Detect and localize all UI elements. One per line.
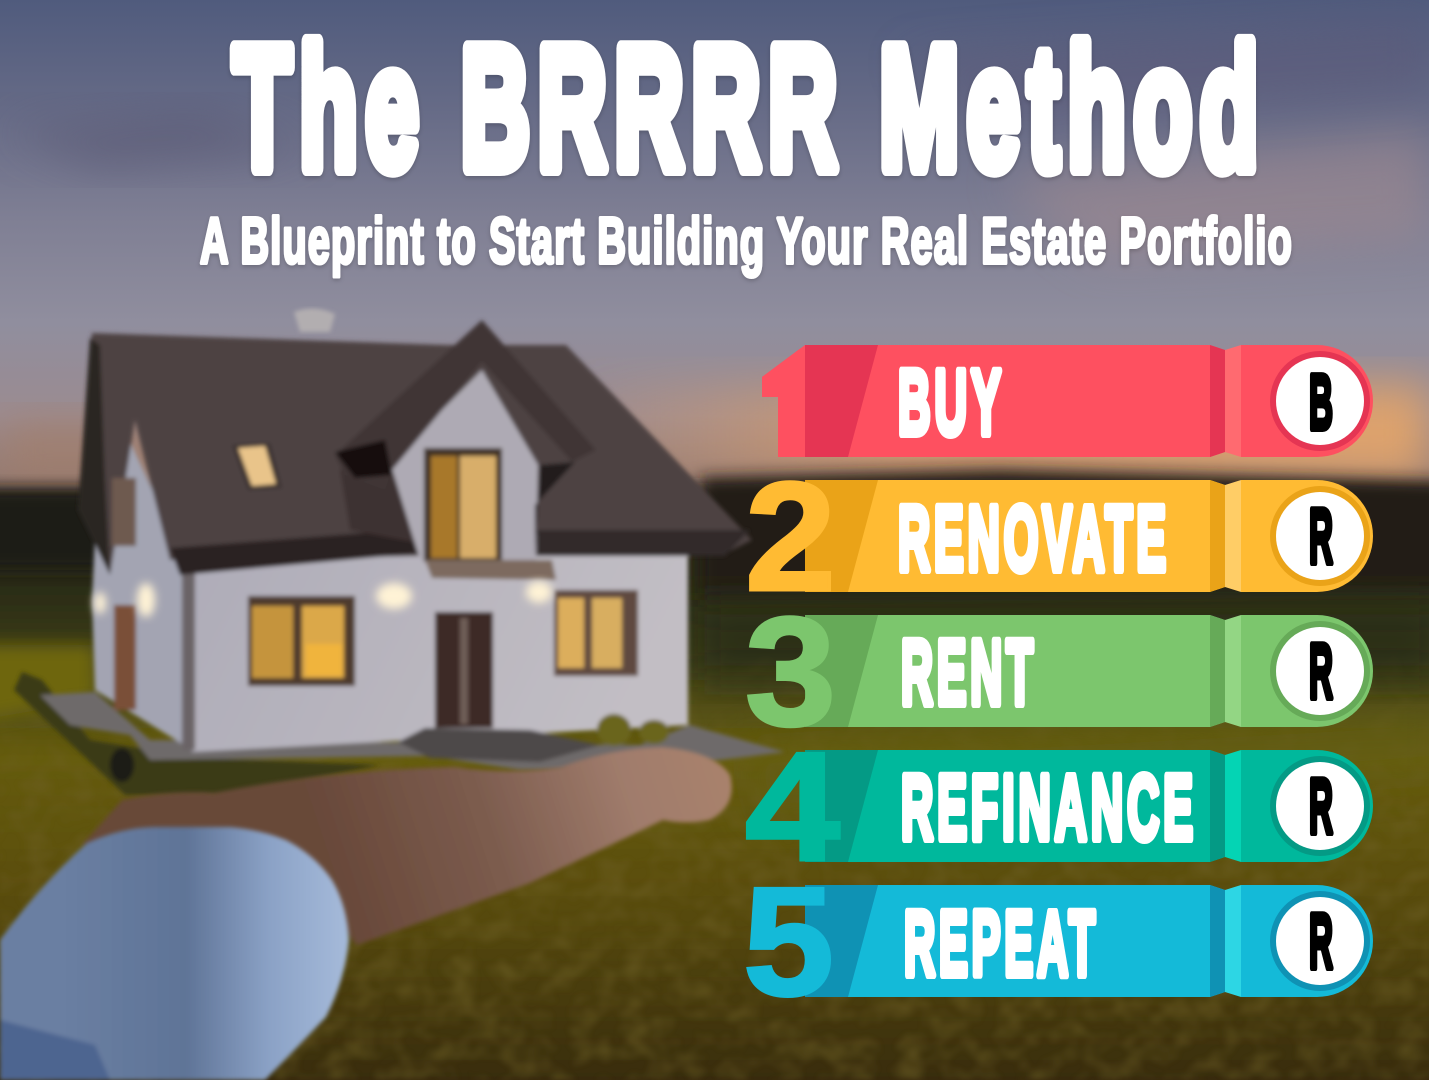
badge B: B [1309, 358, 1333, 446]
base platform [14, 672, 380, 795]
steps [398, 728, 600, 762]
sleeve [0, 827, 349, 1080]
badge R [1270, 486, 1370, 586]
number 3: 3 [745, 585, 836, 758]
step 2: renovate [745, 450, 1373, 623]
lights [94, 581, 552, 617]
front window left [248, 596, 355, 686]
badge B [1270, 351, 1370, 451]
step 5: repeat [743, 855, 1373, 1028]
step 4: refinance [745, 720, 1373, 893]
front door [435, 612, 493, 728]
badge R: R [1309, 492, 1333, 580]
side window and door [112, 478, 136, 546]
roof [78, 333, 752, 575]
step 1: buy: BUY [898, 352, 1005, 454]
badge R: R [1309, 762, 1333, 850]
front window right [554, 590, 638, 676]
hand holding the house [82, 747, 732, 945]
step 3: rent [745, 585, 1373, 758]
balcony [425, 560, 556, 580]
dormer [390, 370, 538, 560]
badge R [1270, 756, 1370, 856]
shrubs [597, 714, 631, 746]
house illustration [14, 320, 785, 795]
number 1 shape [762, 345, 805, 457]
badge R [1270, 621, 1370, 721]
dormer window [424, 448, 502, 562]
badge R: R [1309, 897, 1333, 985]
step 5: repeat: REPEAT [904, 893, 1099, 995]
number 1: 1 [744, 317, 830, 490]
step 1: buy [762, 345, 1373, 457]
step 3: rent: RENT [901, 622, 1037, 724]
chimney [294, 308, 335, 332]
number 4: 4 [745, 720, 840, 893]
badge R [1270, 891, 1370, 991]
number 2: 2 [745, 450, 836, 623]
badge R: R [1309, 627, 1333, 715]
skylight [232, 443, 282, 490]
number 5: 5 [743, 855, 834, 1028]
